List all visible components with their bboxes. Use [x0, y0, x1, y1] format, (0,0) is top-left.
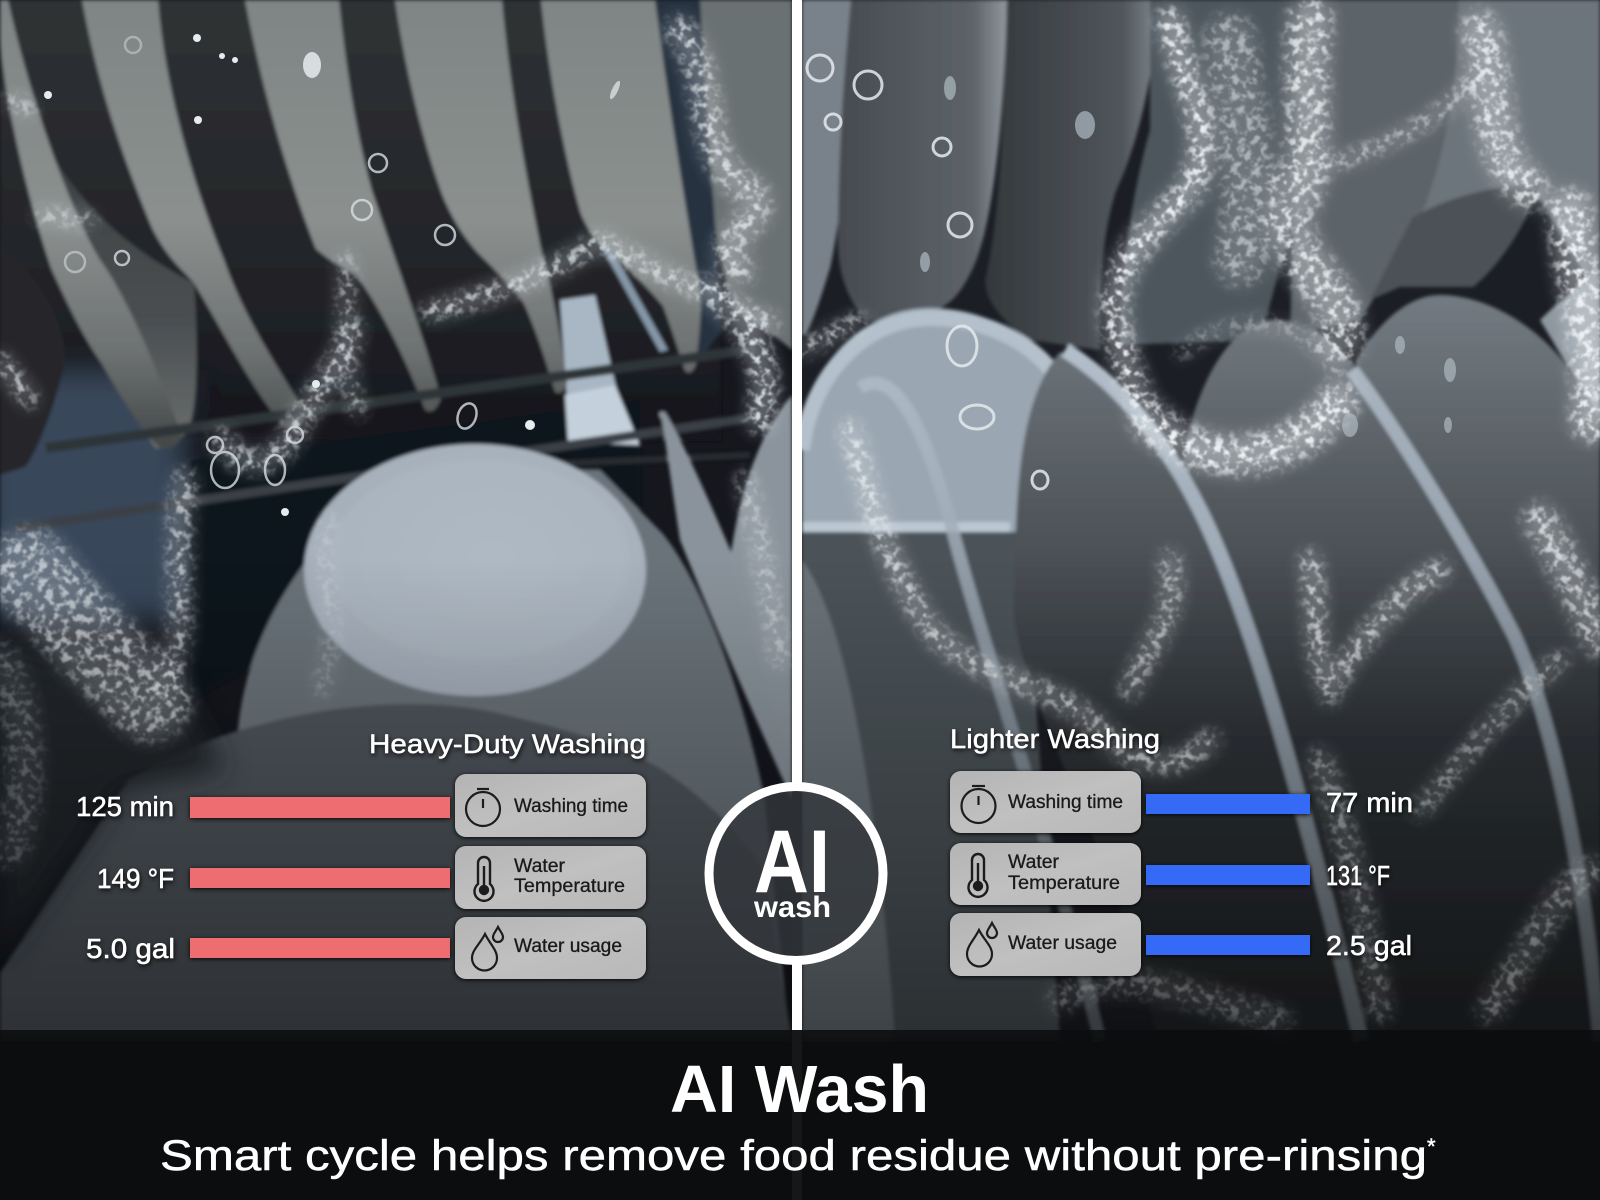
row: water usage 5.0 gal — [86, 917, 646, 979]
badge: AI wash circle: AI — [754, 811, 830, 911]
photo: left half, dish rack with plates and bowl — [0, 0, 792, 1040]
heading: Lighter Washing: Lighter Washing — [950, 724, 1160, 754]
center divider line — [792, 0, 802, 1200]
subtitle: * — [1427, 1134, 1436, 1159]
row: washing time 77 min: 77 min — [1326, 787, 1413, 818]
row: water temperature 149 F: Water — [514, 856, 566, 877]
row: water temperature 131 F — [950, 843, 1390, 905]
row: water usage 2.5 gal — [950, 913, 1412, 976]
row: washing time 125 min: Washing time — [514, 796, 628, 817]
bottom caption band — [0, 1030, 1600, 1200]
row: washing time 125 min — [76, 774, 646, 837]
panel: heavy-duty washing — [76, 729, 646, 979]
row: water usage 2.5 gal: Water usage — [1008, 933, 1117, 954]
row: water temperature 149 F — [97, 846, 646, 909]
badge: AI wash circle: wash — [753, 891, 831, 924]
dark soft area lower left — [0, 640, 225, 960]
row: water usage 5.0 gal: Water usage — [514, 936, 622, 957]
badge: AI wash circle — [709, 786, 883, 960]
panel: lighter washing — [950, 724, 1413, 976]
row: water temperature 131 F: Temperature — [1008, 873, 1120, 894]
heading: Heavy-Duty Washing: Heavy-Duty Washing — [369, 729, 646, 759]
row: washing time 77 min: Washing time — [1008, 792, 1123, 813]
photo: right half, plates under heavy water splash — [802, 0, 1600, 1040]
row: water temperature 149 F: 149 °F — [97, 863, 174, 894]
title: AI Wash: AI Wash — [670, 1052, 929, 1127]
row: washing time 77 min — [950, 771, 1413, 833]
row: water usage 5.0 gal: 5.0 gal — [86, 933, 175, 964]
row: water usage 2.5 gal: 2.5 gal — [1326, 930, 1412, 961]
subtitle: Smart cycle helps remove food residue without pre-rinsing — [160, 1132, 1427, 1180]
row: water temperature 131 F: Water — [1008, 852, 1060, 873]
row: washing time 125 min: 125 min — [76, 791, 174, 822]
row: water temperature 131 F: 131 °F — [1326, 860, 1390, 891]
row: water temperature 149 F: Temperature — [514, 876, 625, 897]
